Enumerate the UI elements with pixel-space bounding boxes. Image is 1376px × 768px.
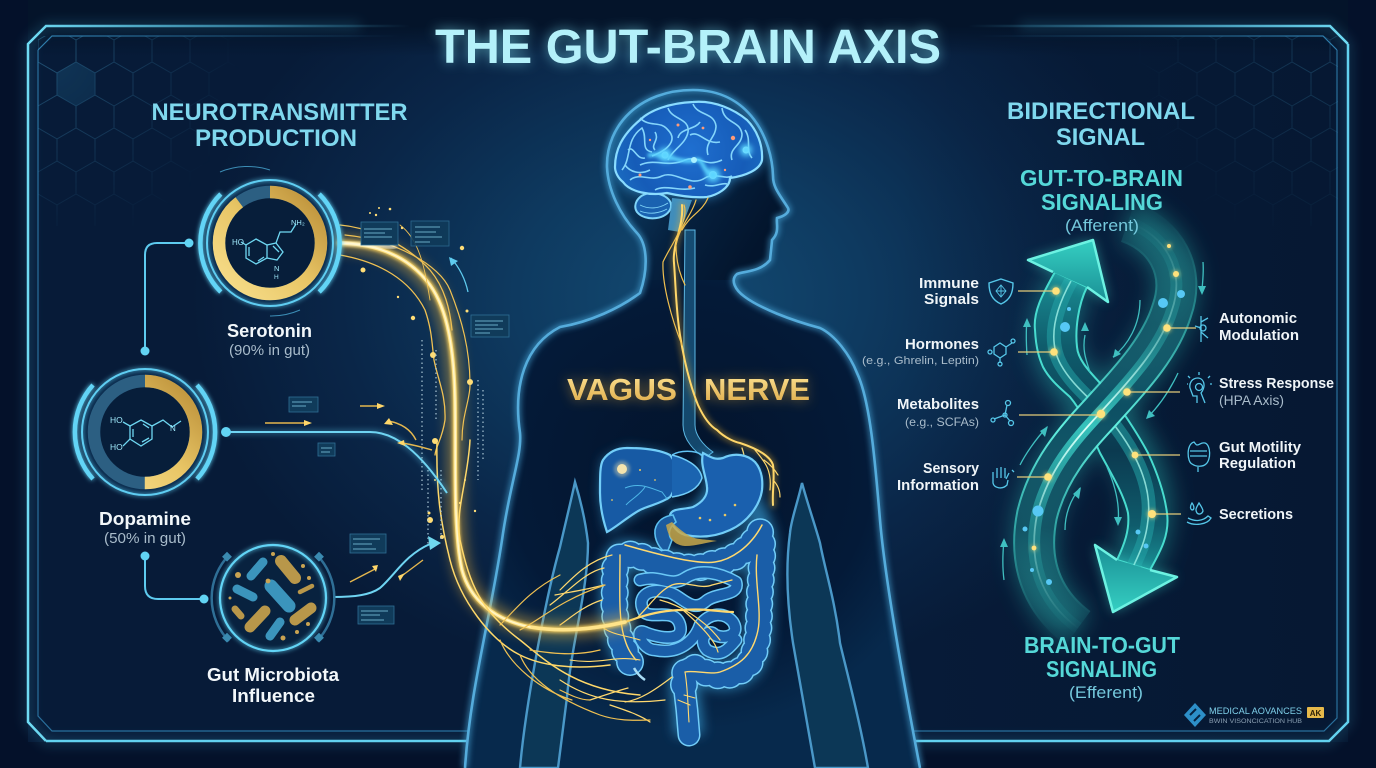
icon: shield <box>989 279 1013 304</box>
digestive organs <box>600 448 762 735</box>
label: autonomic modulation <box>1219 311 1299 344</box>
arrow head: up <box>1028 240 1108 302</box>
molecule: serotonin: H <box>274 274 279 281</box>
molecule: dopamine: N <box>170 424 176 433</box>
band: arrow shaft <box>1035 272 1168 570</box>
arm gap: right <box>787 483 868 768</box>
heading: neurotransmitter production: PRODUCTION <box>195 125 357 152</box>
heading: gut-to-brain signaling: GUT-TO-BRAIN <box>1020 165 1183 191</box>
heading: bidirectional signal: BIDIRECTIONAL <box>1007 98 1195 125</box>
label: vagus nerve: NERVE <box>704 372 810 407</box>
connector: serotonin to dopamine <box>140 238 194 356</box>
stomach <box>670 453 762 537</box>
molecule: dopamine: HO <box>110 415 123 425</box>
label: hormones: Hormones <box>905 337 979 353</box>
label: serotonin: (90% in gut) <box>229 343 310 359</box>
icon: intestine <box>1188 442 1210 472</box>
label: gut motility regulation <box>1219 440 1301 472</box>
leader lines and nodes <box>1017 244 1196 550</box>
icon: drops <box>1187 503 1211 524</box>
footer logo: BWIN VISONCICATION HUB <box>1209 718 1302 725</box>
label: vagus nerve: VAGUS <box>567 372 677 407</box>
node: dopamine <box>75 369 215 495</box>
label: vagus nerve: VAGUS <box>567 372 677 407</box>
duodenum and pancreas <box>655 515 676 553</box>
label: sensory information <box>897 461 979 494</box>
heading: brain-to-gut signaling: SIGNALING <box>1046 656 1157 682</box>
label: stress response: Stress Response <box>1219 376 1334 392</box>
small intestine <box>640 572 736 653</box>
small cyan arrow <box>449 257 468 292</box>
heading: brain-to-gut signaling: BRAIN-TO-GUT <box>1024 632 1180 658</box>
label: stress response <box>1219 376 1334 408</box>
vagus nerve: golden bundle from serotonin to gut <box>340 225 650 720</box>
label: secretions: Secretions <box>1219 507 1293 523</box>
label: metabolites <box>897 397 979 429</box>
molecule: serotonin: N <box>274 264 279 273</box>
label: autonomic modulation: Modulation <box>1219 328 1299 344</box>
data dot columns <box>422 340 483 545</box>
liver <box>600 448 675 532</box>
heading: gut-to-brain signaling: (Afferent) <box>1065 216 1139 235</box>
sparkles along the nerve <box>360 207 476 539</box>
label: serotonin <box>227 321 312 359</box>
label: immune signals: Signals <box>924 292 979 308</box>
label: sensory information: Sensory <box>923 461 979 477</box>
molecule: serotonin: NH₂ <box>291 218 305 227</box>
band particles <box>1022 290 1185 585</box>
label: hormones: (e.g., Ghrelin, Leptin) <box>862 355 979 367</box>
label: dopamine: Dopamine <box>99 509 191 529</box>
label: vagus nerve: NERVE <box>704 372 810 407</box>
title: THE GUT-BRAIN AXIS <box>435 21 941 74</box>
label: stress response: (HPA Axis) <box>1219 393 1284 408</box>
icon: hormone molecule <box>988 339 1015 366</box>
heading: neurotransmitter production <box>152 99 408 152</box>
esophagus <box>683 230 713 458</box>
colon <box>614 532 762 735</box>
icon: nerve junction <box>1195 316 1208 342</box>
colon specks <box>611 469 736 521</box>
icon: head with glow <box>1187 372 1212 403</box>
band: crossing ribbon <box>1034 222 1176 628</box>
arrow: microbiota to nerve <box>333 536 441 597</box>
label: gut microbiota <box>207 664 340 706</box>
appendix <box>634 668 645 680</box>
human body silhouette <box>465 90 920 768</box>
label: gut microbiota: Influence <box>232 685 315 706</box>
molecule: dopamine <box>110 415 181 452</box>
logo mark <box>1184 703 1206 727</box>
label: hormones <box>862 337 979 367</box>
brain <box>615 102 762 232</box>
heading: brain-to-gut signaling <box>1024 632 1180 702</box>
vagus nerve: spinal trunk <box>663 198 780 510</box>
arm gap: left <box>520 482 588 768</box>
label: vagus nerve <box>567 372 810 407</box>
molecule: serotonin <box>232 218 305 281</box>
arrows around helix <box>1000 262 1206 580</box>
hud label boxes <box>289 221 509 624</box>
icon: metabolite network <box>991 400 1014 426</box>
molecule: serotonin: HO <box>232 238 244 247</box>
footer logo: MEDICAL AOVANCES <box>1209 706 1302 717</box>
heading: brain-to-gut signaling: (Efferent) <box>1069 683 1143 702</box>
helix: efferent and afferent arrows <box>1022 222 1185 628</box>
label: dopamine: (50% in gut) <box>104 531 186 547</box>
heading: bidirectional signal <box>1007 98 1195 151</box>
bacteria <box>228 552 312 640</box>
hexagon pattern: top right <box>1174 36 1338 204</box>
small gold arrows <box>265 403 432 582</box>
heading: gut-to-brain signaling <box>1020 165 1183 235</box>
footer logo <box>1184 703 1324 727</box>
label: immune signals <box>919 276 979 308</box>
node: serotonin <box>200 166 340 316</box>
heading: neurotransmitter production: NEUROTRANSMITTER <box>152 99 408 126</box>
icon: hand <box>993 467 1014 488</box>
label: autonomic modulation: Autonomic <box>1219 311 1297 327</box>
organ glow <box>600 448 762 735</box>
label: gut motility regulation: Regulation <box>1219 456 1296 472</box>
label: metabolites: Metabolites <box>897 397 979 413</box>
heading: gut-to-brain signaling: SIGNALING <box>1041 189 1163 215</box>
vagus nerve branches in the gut <box>550 525 762 722</box>
heading: bidirectional signal: SIGNAL <box>1056 124 1145 151</box>
title: THE GUT-BRAIN AXIS <box>435 21 941 74</box>
node: gut microbiota <box>212 545 334 651</box>
soft glow <box>1034 222 1176 628</box>
hexagon pattern: top left <box>38 36 210 221</box>
label: dopamine <box>99 509 191 547</box>
label: metabolites: (e.g., SCFAs) <box>905 415 979 429</box>
label: serotonin: Serotonin <box>227 321 312 341</box>
connector: dopamine to nerve <box>221 427 447 493</box>
label: sensory information: Information <box>897 478 979 494</box>
footer logo: AK <box>1310 709 1321 718</box>
liver bright spot <box>617 464 627 474</box>
label: immune signals: Immune <box>919 276 979 292</box>
label: gut motility regulation: Gut Motility <box>1219 440 1301 456</box>
label: gut microbiota: Gut Microbiota <box>207 664 340 685</box>
molecule: dopamine: HO <box>110 442 123 452</box>
connector: dopamine to microbiota <box>140 552 208 604</box>
arrow head: down <box>1095 545 1177 612</box>
